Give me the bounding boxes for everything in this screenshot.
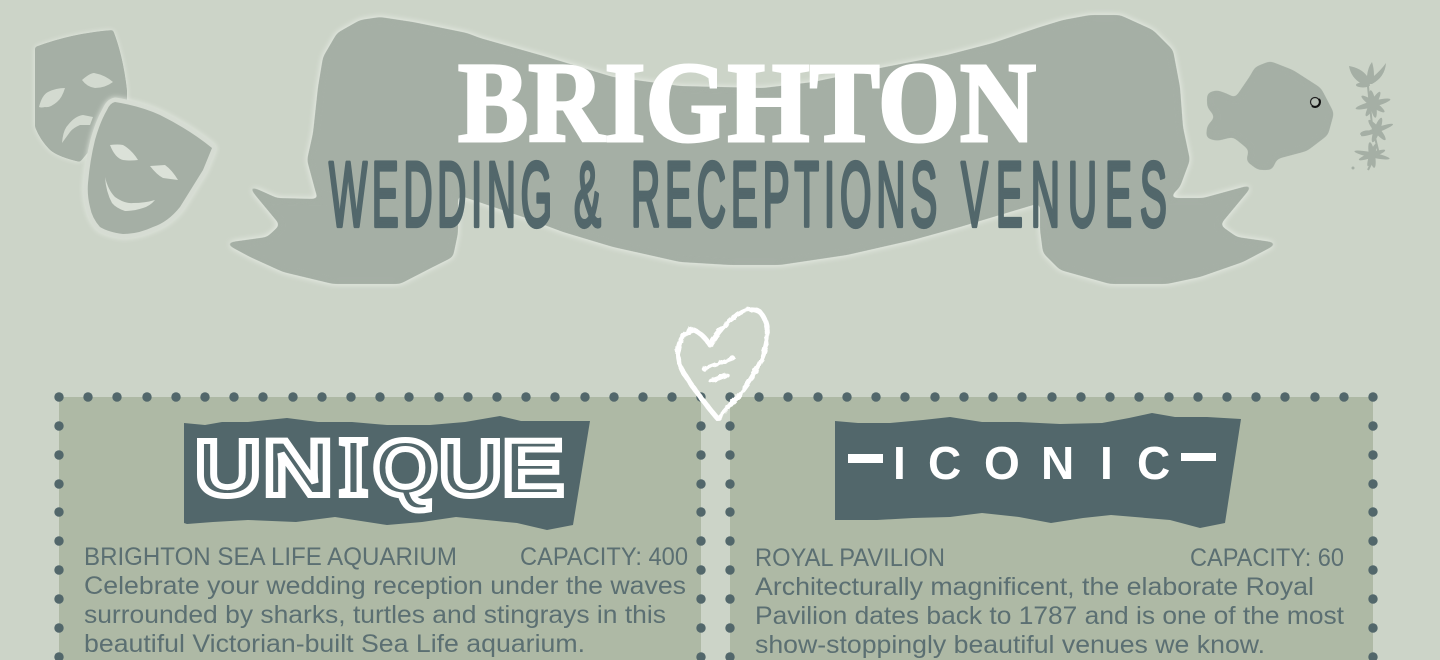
venue text: Royal Pavilion: CAPACITY: 60 — [1190, 544, 1344, 572]
venue text: Royal Pavilion: Architecturally magnificent, the elaborate Royal — [755, 573, 1314, 601]
torn label: unique: U — [439, 423, 502, 512]
subtitle: wedding and receptions venues: WEDDING — [329, 144, 552, 247]
venue text: Brighton Sea Life Aquarium: surrounded by sharks, turtles and stingrays in this — [84, 601, 666, 629]
dotted border: iconic panel — [725, 392, 1378, 660]
subtitle: wedding and receptions venues: RECEPTIONS — [631, 144, 937, 247]
torn label: iconic: ICONIC — [893, 437, 1170, 489]
venue text: Royal Pavilion: Pavilion dates back to 1787 and is one of the most — [755, 602, 1344, 630]
subtitle: wedding and receptions venues: VENUES — [961, 144, 1167, 247]
torn label: iconic — [835, 413, 1241, 528]
torn label: unique: N — [263, 423, 333, 512]
venue text: Brighton Sea Life Aquarium: beautiful Victorian-built Sea Life aquarium. — [84, 630, 585, 658]
torn label: unique: U — [195, 423, 261, 512]
title: Brighton: BRIGHTON — [458, 39, 1036, 166]
venue text: Royal Pavilion — [755, 544, 1344, 659]
venue text: Brighton Sea Life Aquarium — [84, 543, 688, 658]
torn label: unique: E — [502, 423, 564, 512]
icon: sad mask — [35, 30, 127, 162]
torn label: unique — [184, 416, 590, 530]
torn label: unique: I — [339, 421, 368, 514]
icon: theatre masks — [35, 30, 212, 234]
venue text: Royal Pavilion: show-stoppingly beautiful venues we know. — [755, 631, 1265, 659]
subtitle: wedding and receptions venues — [329, 144, 1167, 247]
venue text: Royal Pavilion: ROYAL PAVILION — [755, 544, 945, 572]
venue text: Brighton Sea Life Aquarium: Celebrate your wedding reception under the waves — [84, 572, 686, 600]
icon: seaweed sprig — [1349, 62, 1394, 170]
icon: fish — [1206, 61, 1334, 170]
dotted border: unique panel — [54, 392, 706, 660]
panel: iconic — [725, 392, 1378, 660]
ribbon banner — [224, 15, 1279, 284]
icon: happy mask — [88, 102, 212, 234]
subtitle: wedding and receptions venues: & — [574, 144, 601, 247]
venue text: Brighton Sea Life Aquarium: CAPACITY: 400 — [520, 543, 688, 571]
panel: unique — [54, 392, 706, 660]
icon: hand-drawn heart — [678, 309, 767, 419]
venue text: Brighton Sea Life Aquarium: BRIGHTON SEA LIFE AQUARIUM — [84, 543, 457, 571]
torn label: unique: Q — [373, 423, 438, 512]
